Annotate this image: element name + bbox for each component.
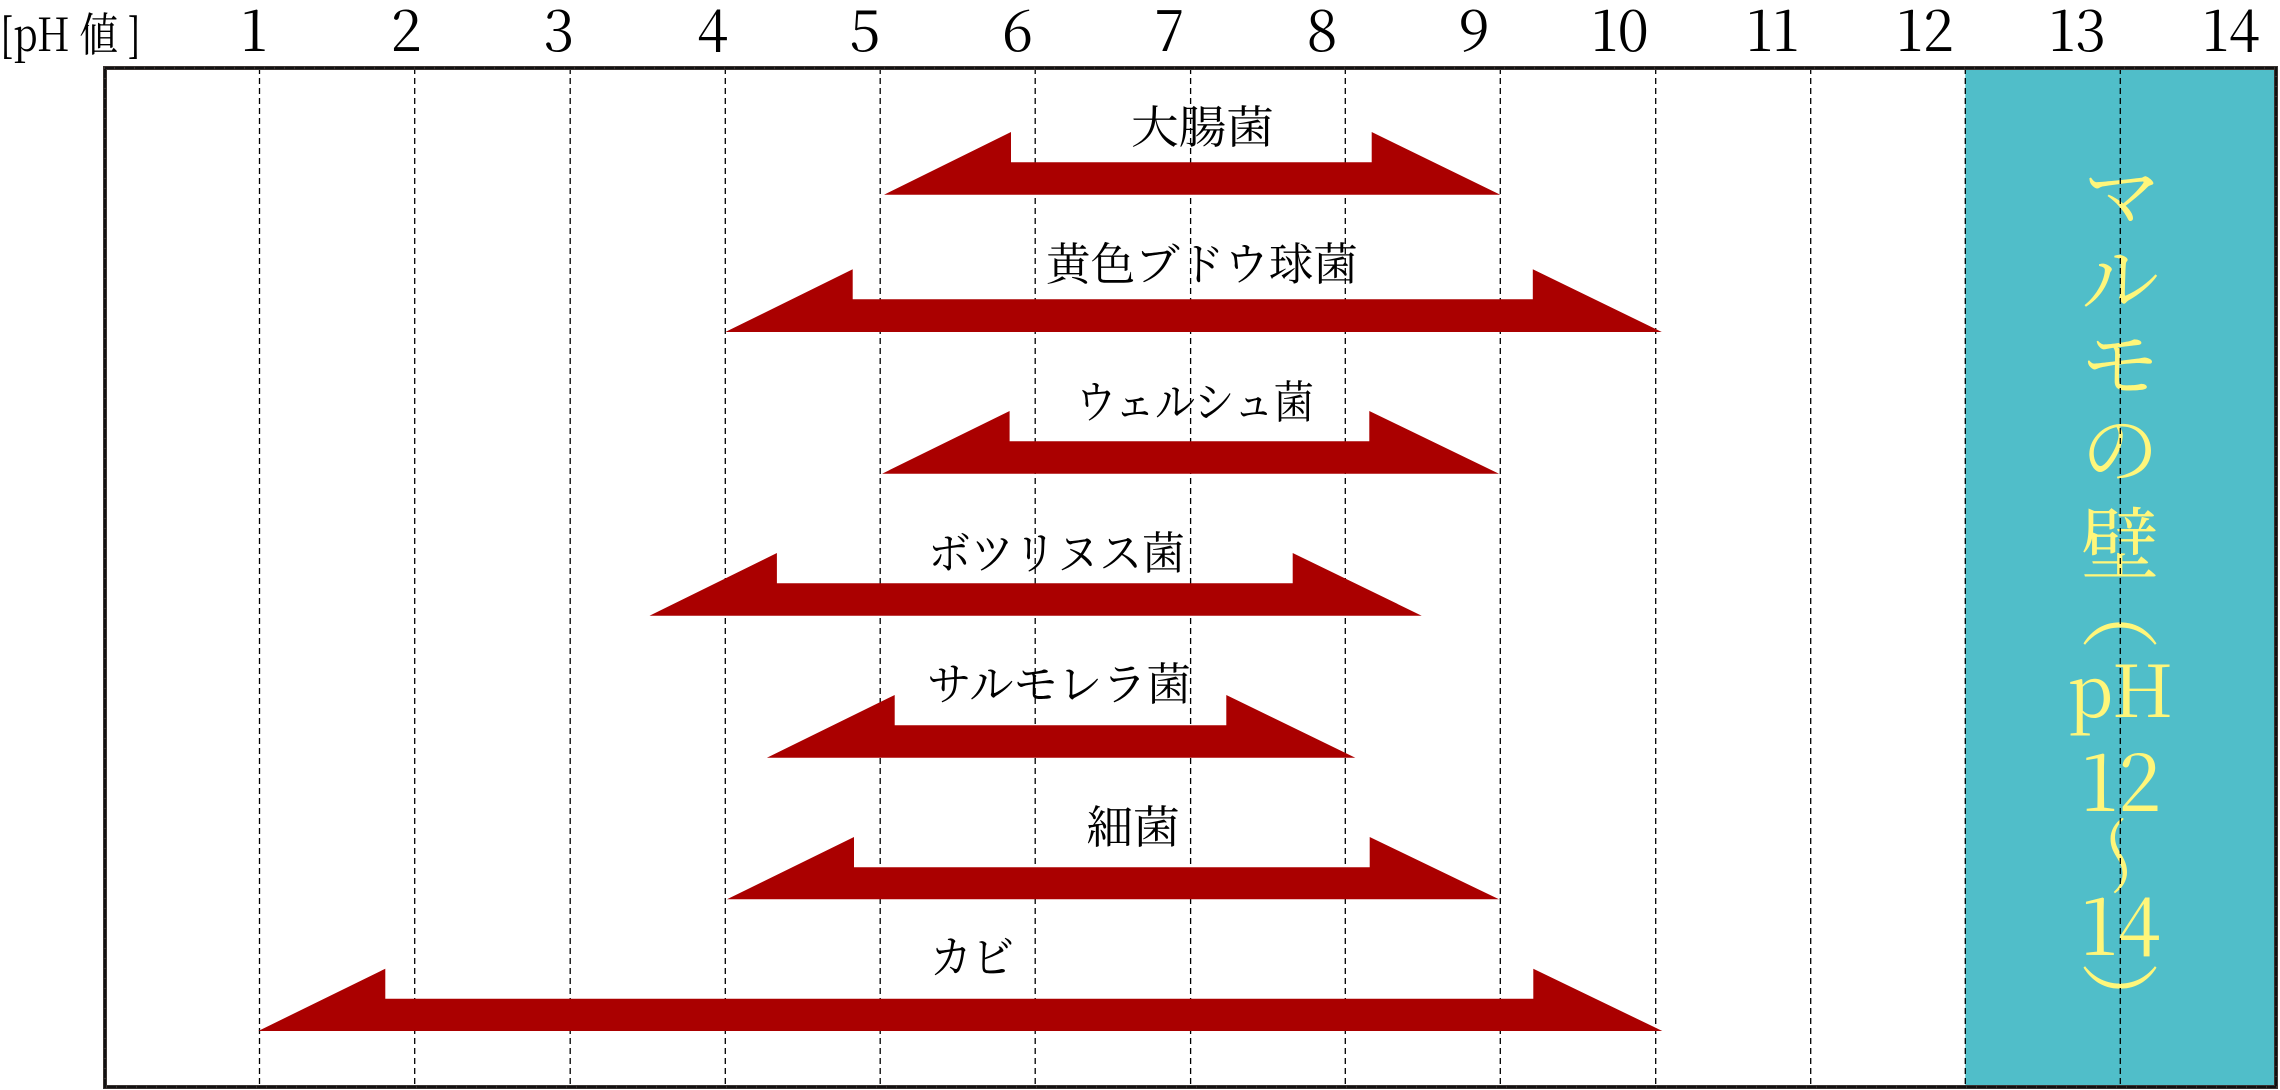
arrow: bacteria range bbox=[727, 791, 1499, 899]
arrow: mold range bbox=[258, 921, 1662, 1031]
arrow: bacteria range: 細菌 bbox=[1086, 791, 1180, 856]
vertical label: marumo wall bbox=[2055, 135, 2176, 1053]
panel: marumo wall band bbox=[1965, 68, 2275, 1087]
vertical label: marumo wall: 壁 bbox=[2081, 483, 2159, 595]
axis unit label: [pH 値 ] bbox=[0, 0, 141, 65]
arrow: salmonella range bbox=[767, 648, 1355, 758]
vertical label: marumo wall: 12 bbox=[2081, 722, 2161, 834]
arrow: salmonella range: サルモレラ菌 bbox=[927, 648, 1191, 713]
arrow: Staphylococcus aureus range: 黄色ブドウ球菌 bbox=[1046, 228, 1358, 293]
vertical label: marumo wall: ︶ bbox=[2081, 941, 2159, 1053]
arrow: mold range: カビ bbox=[930, 921, 1014, 986]
vertical label: marumo wall: pH bbox=[2068, 634, 2173, 738]
vertical label: marumo wall: ︵ bbox=[2081, 551, 2159, 663]
vertical label: marumo wall: 〜 bbox=[2055, 813, 2176, 898]
arrow: botulinum range: ボツリヌス菌 bbox=[928, 517, 1185, 582]
vertical label: marumo wall: マ bbox=[2083, 135, 2161, 247]
arrow: Clostridium perfringens range bbox=[882, 366, 1499, 474]
arrow: Staphylococcus aureus range bbox=[725, 228, 1662, 332]
vertical label: marumo wall: 14 bbox=[2080, 866, 2161, 978]
vertical label: marumo wall: の bbox=[2081, 389, 2159, 501]
vertical label: marumo wall: ル bbox=[2081, 219, 2159, 331]
arrow: E. coli range bbox=[884, 91, 1500, 195]
arrow: E. coli range: 大腸菌 bbox=[1131, 91, 1274, 156]
vertical label: marumo wall: モ bbox=[2081, 303, 2159, 415]
arrow: botulinum range bbox=[650, 517, 1422, 616]
axis numbers bbox=[241, 0, 2260, 68]
arrow: Clostridium perfringens range: ウェルシュ菌 bbox=[1076, 366, 1314, 431]
